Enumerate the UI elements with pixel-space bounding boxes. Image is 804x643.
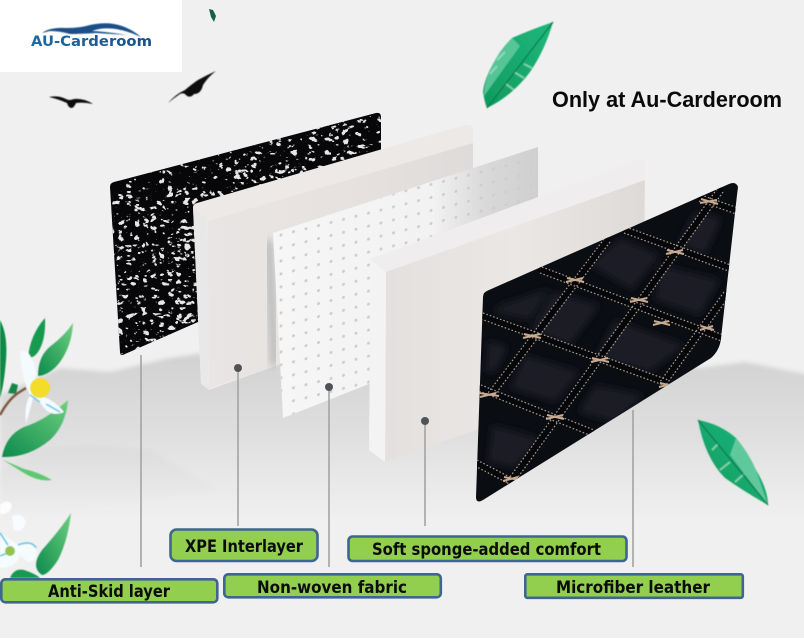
leather cushion cells bbox=[485, 212, 722, 468]
label: Non-woven fabric: Non-woven fabric bbox=[257, 578, 407, 598]
leader line: microfiber bbox=[632, 410, 634, 567]
label: XPE Interlayer: XPE Interlayer bbox=[185, 537, 304, 557]
panel: microfiber leather bbox=[475, 183, 741, 501]
leader line: anti-skid bbox=[140, 355, 142, 567]
heading: Only at Au-Carderoom: Only at Au-Carderoom bbox=[552, 87, 782, 112]
label: Anti-Skid layer bbox=[1, 579, 217, 602]
icon: green leaf top bbox=[483, 22, 553, 108]
illustration: flowering branch bbox=[0, 318, 73, 578]
icon: car logo swoosh bbox=[42, 23, 141, 37]
mountains bbox=[0, 340, 804, 520]
icon: bird left bbox=[49, 96, 93, 108]
panel: soft sponge bbox=[369, 160, 645, 462]
icon: bird right bbox=[168, 71, 216, 103]
panel: non-woven fabric bbox=[273, 147, 538, 418]
stitch crossings bbox=[479, 199, 718, 481]
label: Non-woven fabric bbox=[224, 574, 441, 598]
leader line: XPE bbox=[234, 364, 242, 526]
icon: green leaf lower right bbox=[698, 420, 768, 505]
leader line: non-woven bbox=[325, 383, 333, 567]
leader line: sponge bbox=[421, 417, 429, 526]
logo text: AU-Carderoom bbox=[31, 34, 152, 50]
label: Microfiber leather bbox=[525, 574, 743, 598]
stitch grooves bbox=[476, 190, 740, 486]
label: Soft sponge-added comfort: Soft sponge-added comfort bbox=[372, 540, 601, 560]
label: XPE Interlayer bbox=[170, 530, 318, 561]
panel: XPE interlayer bbox=[193, 125, 473, 390]
double stitching bbox=[475, 189, 741, 489]
panel: anti-skid layer bbox=[105, 108, 385, 360]
icon: small falling leaf bbox=[209, 9, 216, 22]
label: Microfiber leather: Microfiber leather bbox=[556, 578, 711, 598]
label: Anti-Skid layer: Anti-Skid layer bbox=[48, 582, 171, 602]
logo panel bbox=[0, 0, 182, 72]
